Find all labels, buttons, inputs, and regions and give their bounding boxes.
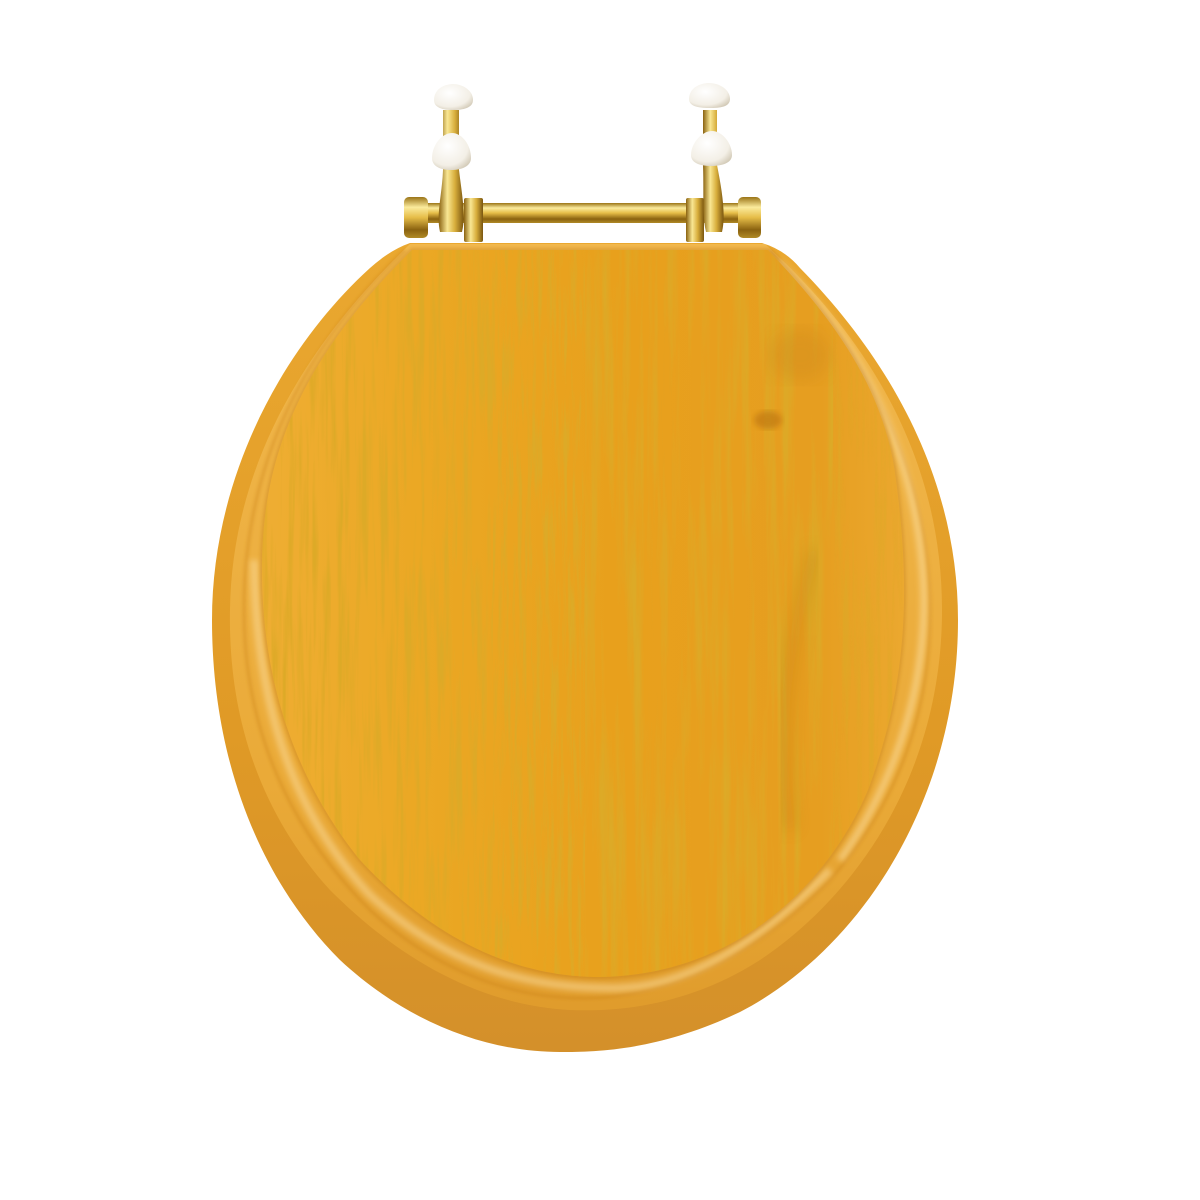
dark knot — [754, 411, 782, 429]
panel shadow edge — [262, 250, 904, 977]
left lower cap — [432, 133, 471, 170]
left collar — [464, 198, 483, 242]
centre-right board grain — [585, 245, 833, 985]
product photo: oak toilet seat with brass hinges — [212, 83, 958, 1052]
centre-left board grain — [493, 245, 585, 985]
rim highlight — [778, 262, 924, 860]
lower seat shell — [212, 243, 958, 1052]
left post — [439, 110, 464, 232]
left board grain — [262, 250, 493, 942]
right end cap — [738, 197, 761, 238]
rim groove — [244, 250, 930, 998]
right top cap — [689, 83, 730, 108]
hinge assembly — [404, 83, 761, 242]
moulded lid rim — [230, 244, 942, 1010]
right lower cap — [691, 131, 732, 166]
seat — [212, 243, 958, 1052]
brass rod — [404, 203, 760, 223]
right collar — [686, 198, 704, 242]
wood panel with grain — [250, 245, 923, 985]
right post — [703, 110, 724, 232]
left end cap — [404, 197, 428, 238]
left top cap — [434, 84, 473, 110]
right board grain — [872, 676, 892, 762]
